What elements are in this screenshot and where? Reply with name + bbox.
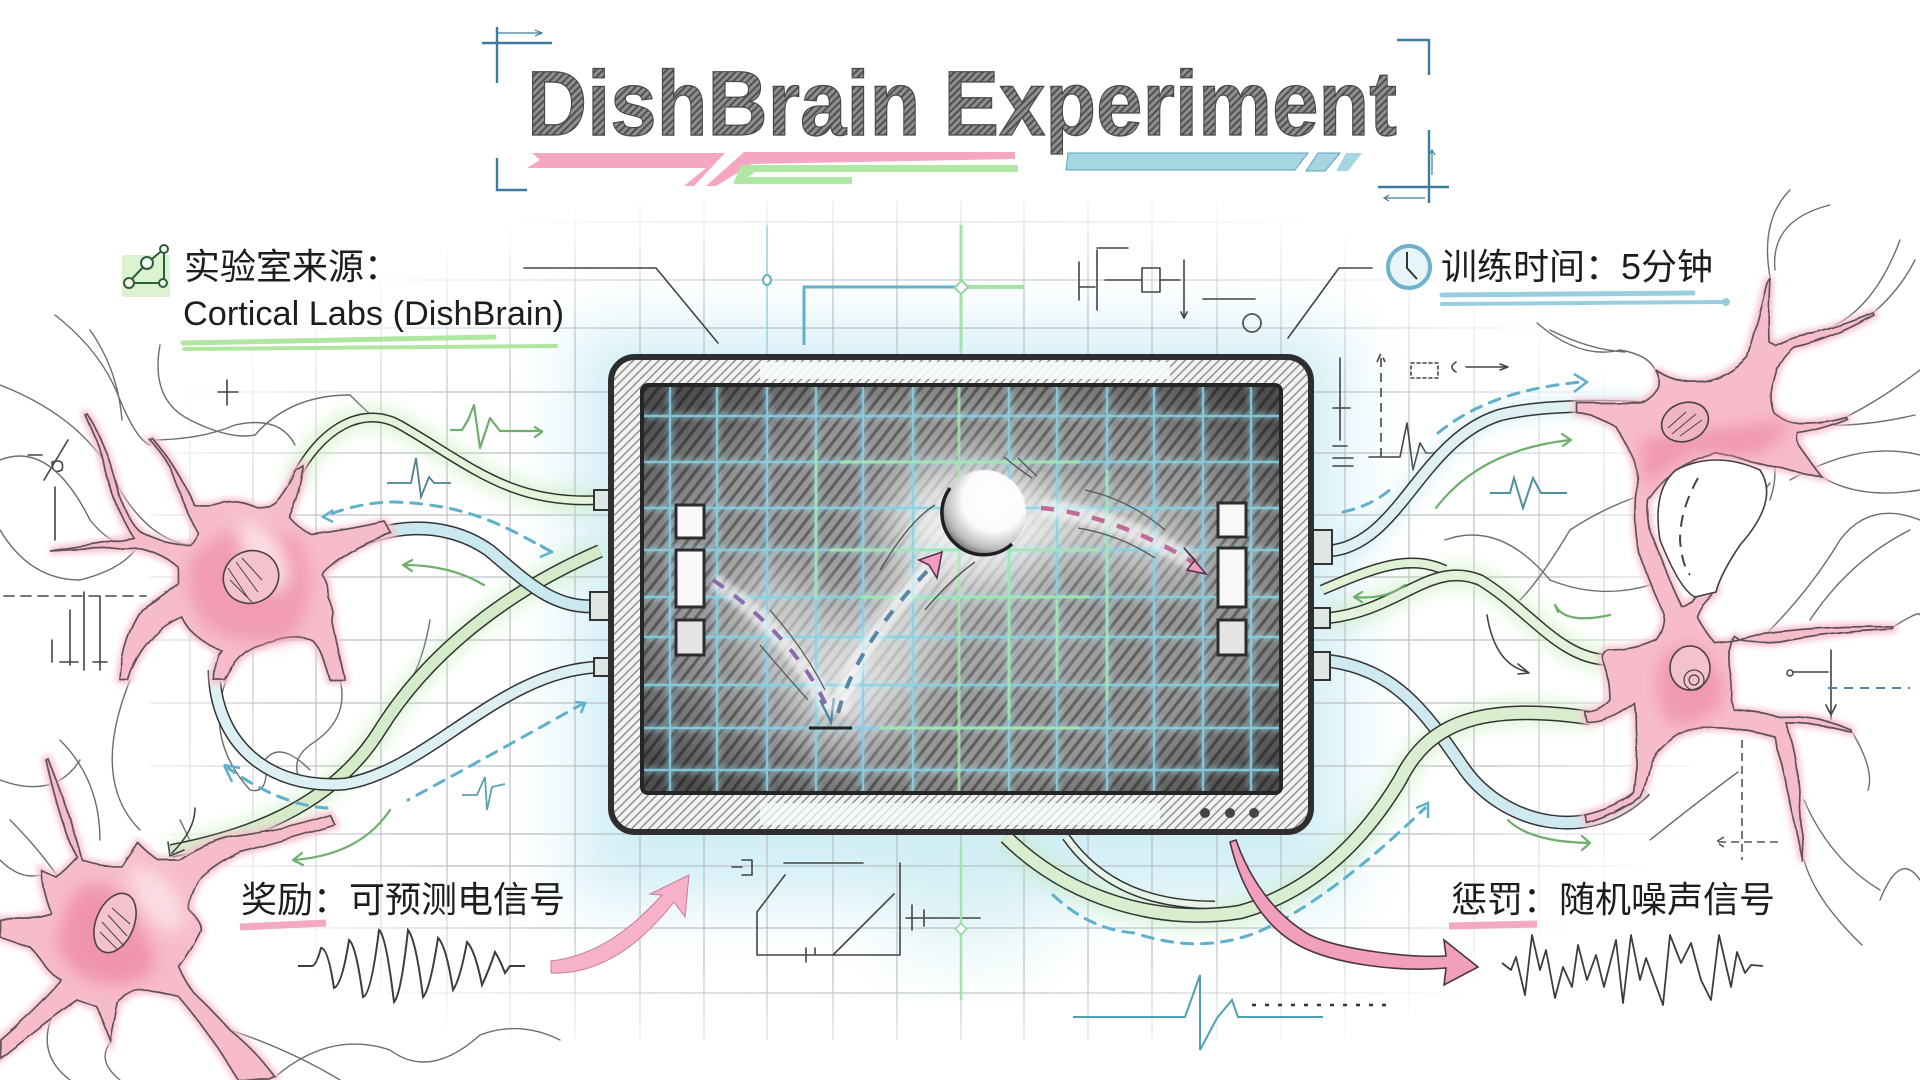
title text: DishBrain Experiment (527, 53, 1397, 155)
cable under monitor secondary (1066, 837, 1215, 905)
pink underline (1449, 924, 1537, 926)
ball trajectory: to paddle (1041, 490, 1206, 574)
right symbols (1790, 650, 1836, 720)
left paddle (676, 505, 704, 655)
ball trajectory: bounce up (838, 552, 942, 713)
waveform: predictable (298, 930, 525, 1002)
small green arrows (1354, 585, 1405, 602)
background glow behind monitor (575, 330, 1345, 960)
screen grid glow (642, 385, 1281, 793)
callout: lab source (122, 245, 564, 349)
screen (642, 385, 1281, 793)
screen grid blue (642, 385, 1281, 793)
schematic sketches around monitor (4, 225, 1910, 1000)
long green cable right (1006, 713, 1590, 915)
blue cable lower right (1329, 661, 1645, 823)
neuron: upper left (50, 414, 392, 680)
neuron inner void (1658, 460, 1767, 597)
green cable diagonal (171, 551, 600, 851)
label text: 训练时间：5分钟 (1441, 246, 1713, 287)
callout: punishment (1230, 840, 1775, 1005)
top crosshair circuit (763, 225, 1024, 350)
green underline (183, 337, 556, 349)
left symbols (28, 380, 238, 540)
dark arrow (1487, 615, 1529, 674)
green arrow lower (1508, 820, 1590, 850)
blue dashed lower (1053, 808, 1425, 944)
leader line left (524, 268, 718, 343)
signal annotations left (168, 405, 585, 865)
bounce mark (809, 726, 852, 730)
neuron nuclei (1656, 395, 1714, 690)
screen grid green (816, 385, 1107, 793)
lower left pointer (168, 808, 195, 856)
monitor (611, 357, 1311, 832)
green arrow (1436, 434, 1571, 508)
blue dashed arrow (326, 502, 552, 552)
top right circuit sketch (1079, 248, 1255, 318)
ecg green (451, 405, 542, 448)
title pink strokes (527, 152, 1015, 186)
bezel dots (1200, 808, 1259, 818)
neuron body shading (55, 883, 156, 985)
lower blue dashed arrow (408, 703, 584, 800)
cable glows (171, 406, 1650, 915)
label value: Cortical Labs (DishBrain) (183, 295, 564, 333)
blue cable lower left (214, 667, 600, 784)
waveform: noise (1502, 935, 1763, 1005)
icon: clock (1388, 246, 1430, 288)
neuron body shading (1640, 420, 1790, 490)
title bracket corners (482, 27, 1449, 203)
bottom circuit sketch (732, 860, 980, 962)
label text: 惩罚：随机噪声信号 (1451, 879, 1775, 920)
blue dashed arrow (1343, 485, 1395, 512)
title block (482, 27, 1449, 203)
arrow: monitor to punishment (1230, 840, 1478, 985)
blue cable upper right (1329, 406, 1650, 551)
label text: 奖励：可预测电信号 (241, 879, 565, 920)
arrow: reward to monitor (551, 875, 689, 973)
neuron: lower left (0, 759, 335, 1080)
green cable right pair (1322, 563, 1610, 660)
ecg teal (1490, 478, 1567, 508)
blue cable mid left (330, 528, 600, 606)
green arrow (403, 560, 484, 585)
background blueprint grid (150, 200, 1700, 1040)
lower green arrow (293, 810, 390, 865)
pong ball (880, 457, 1037, 610)
connectors on monitor (590, 490, 1332, 680)
title green strokes (733, 165, 1018, 184)
callout: reward (240, 875, 689, 1002)
green cable top left (292, 418, 600, 500)
neuron body shading (187, 529, 310, 643)
lower ecg (462, 777, 505, 810)
ball trajectory: incoming (713, 580, 834, 722)
neuron nucleus (86, 887, 144, 959)
neuron: right pair (1577, 278, 1893, 862)
title blue strokes (1066, 153, 1362, 171)
neuron nucleus (215, 542, 287, 612)
signal annotations right (1053, 374, 1610, 944)
blue underline (1442, 293, 1726, 304)
bottom ecg trace (1073, 975, 1390, 1050)
label heading: 实验室来源： (184, 246, 400, 287)
tubes: wet-lab cables connecting neurons and monitor (171, 406, 1650, 915)
icon: network triangle (122, 245, 170, 297)
ecg gray-blue (387, 458, 451, 497)
pink underline (240, 923, 326, 927)
screen vignette (642, 385, 1281, 793)
screen white glow (707, 460, 1222, 744)
bezel highlights (760, 362, 1170, 825)
screen edge (642, 385, 1281, 793)
callout: training time (1388, 246, 1730, 306)
right side schematic (1333, 358, 1353, 466)
right paddle (1218, 503, 1246, 655)
monitor bezel (611, 357, 1311, 832)
leader line right (1288, 268, 1372, 338)
screen pencil hatch (642, 385, 1281, 793)
